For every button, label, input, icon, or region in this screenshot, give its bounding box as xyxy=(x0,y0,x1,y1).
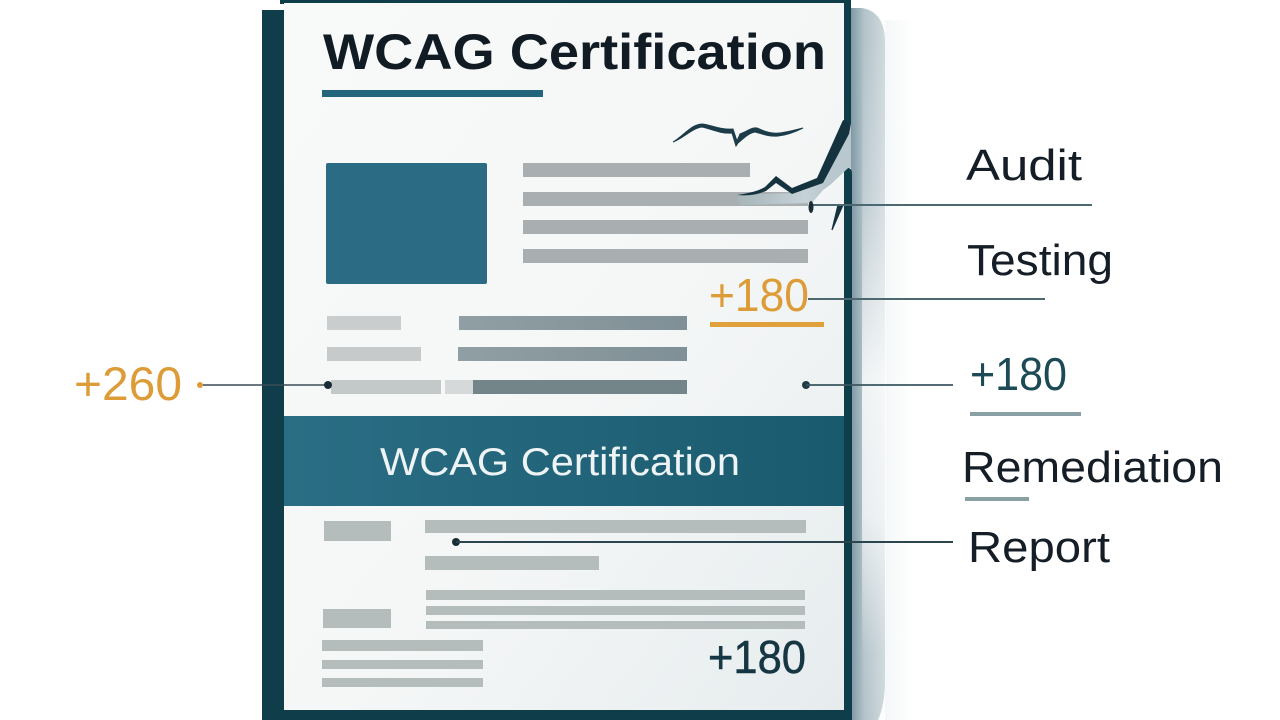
banner: WCAG Certification xyxy=(380,441,740,484)
image placeholder xyxy=(326,163,487,284)
callout: Report: Report xyxy=(968,523,1110,572)
callout: Audit xyxy=(808,141,1092,213)
orange +180 callout: +180 xyxy=(709,269,809,321)
dark +180 stat: +180 xyxy=(708,631,806,683)
title: WCAG Certification xyxy=(323,24,826,80)
document frame xyxy=(262,0,852,720)
lower text blocks xyxy=(322,520,806,687)
document drop shadow xyxy=(851,8,915,720)
callout: Testing: Testing xyxy=(967,236,1113,285)
torn page corner xyxy=(737,120,851,230)
title underline xyxy=(322,90,543,97)
left callout: +260 xyxy=(74,357,182,410)
document sheet xyxy=(284,3,844,710)
text lines beside image xyxy=(523,163,808,263)
left callout xyxy=(74,357,332,410)
callout: +180: +180 xyxy=(970,348,1067,400)
middle rows xyxy=(327,316,687,394)
crack mark xyxy=(673,124,803,146)
banner xyxy=(284,416,844,506)
callout: Remediation: Remediation xyxy=(962,443,1223,492)
callout: Audit: Audit xyxy=(966,141,1082,190)
callout: Report xyxy=(452,523,1110,572)
callout: +180 xyxy=(802,348,1081,416)
